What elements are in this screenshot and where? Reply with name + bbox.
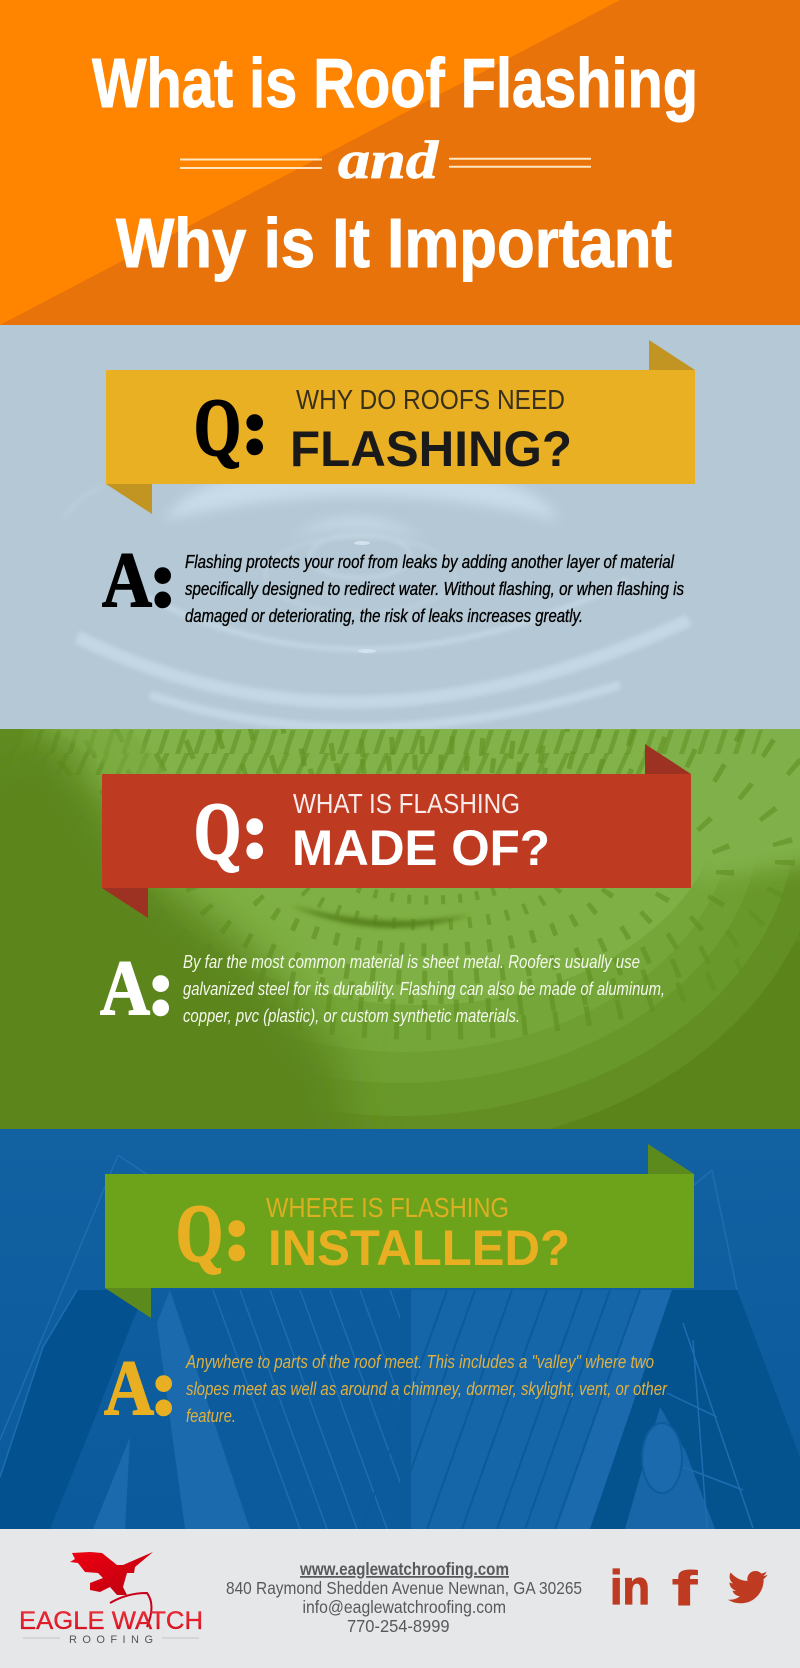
icon: eagle bbox=[70, 1552, 153, 1627]
divider lines left bbox=[180, 160, 322, 168]
ribbon banner bbox=[105, 1144, 694, 1318]
script word: and: and bbox=[338, 130, 439, 190]
question marker: : bbox=[225, 1192, 249, 1275]
question text: WHAT IS FLASHING bbox=[293, 788, 520, 819]
wordmark: EAGLE WATCH bbox=[19, 1607, 203, 1635]
question text bbox=[290, 384, 572, 477]
answer marker: : bbox=[149, 947, 173, 1030]
background: woven swirl facade bbox=[0, 729, 800, 1129]
answer marker: A bbox=[102, 536, 152, 623]
answer text: galvanized steel for its durability. Flashing can also be made of aluminum, bbox=[183, 978, 665, 999]
answer marker: : bbox=[151, 539, 175, 622]
question marker: Q bbox=[194, 786, 241, 877]
answer text bbox=[185, 551, 684, 626]
question marker: : bbox=[243, 790, 267, 873]
icon: twitter bbox=[728, 1571, 768, 1603]
contact details bbox=[226, 1559, 582, 1636]
question text bbox=[292, 788, 550, 876]
answer text: By far the most common material is sheet metal. Roofers usually use bbox=[183, 951, 640, 972]
answer text bbox=[183, 951, 665, 1026]
panel: title header bbox=[0, 0, 800, 325]
answer text: specifically designed to redirect water. Without flashing, or when flashing is bbox=[185, 578, 684, 599]
panel: footer bbox=[0, 1529, 800, 1668]
answer marker: A bbox=[100, 944, 150, 1031]
panel: what is flashing made of bbox=[0, 729, 800, 1129]
question marker: Q bbox=[194, 382, 241, 473]
contact details: 770-254-8999 bbox=[347, 1616, 450, 1636]
background: water ripples bbox=[0, 325, 800, 729]
question marker: Q bbox=[176, 1188, 223, 1279]
icon: facebook: f bbox=[672, 1563, 699, 1616]
tagline: ROOFING bbox=[69, 1634, 153, 1646]
question text bbox=[266, 1192, 570, 1276]
answer text: Flashing protects your roof from leaks by adding another layer of material bbox=[185, 551, 675, 572]
contact details: info@eaglewatchroofing.com bbox=[302, 1597, 506, 1617]
ribbon banner bbox=[106, 340, 695, 514]
answer text: copper, pvc (plastic), or custom synthetic materials. bbox=[183, 1005, 520, 1026]
panel: why do roofs need flashing bbox=[0, 325, 800, 729]
answer marker: A bbox=[104, 1344, 154, 1431]
ribbon banner bbox=[102, 744, 691, 918]
question text: INSTALLED? bbox=[268, 1220, 570, 1276]
answer marker: : bbox=[152, 1347, 176, 1430]
contact details: 840 Raymond Shedden Avenue Newnan, GA 30265 bbox=[226, 1578, 582, 1598]
question text: FLASHING? bbox=[290, 421, 572, 477]
contact details: www.eaglewatchroofing.com bbox=[299, 1559, 509, 1579]
background: steep metal roof building bbox=[0, 1129, 800, 1529]
answer text: slopes meet as well as around a chimney, dormer, skylight, vent, or other bbox=[186, 1378, 668, 1399]
logo: eagle watch roofing bbox=[19, 1552, 203, 1646]
question text: WHY DO ROOFS NEED bbox=[296, 384, 565, 415]
answer text: feature. bbox=[186, 1405, 236, 1426]
question text: WHERE IS FLASHING bbox=[266, 1192, 509, 1223]
question marker: : bbox=[243, 386, 267, 469]
divider lines right bbox=[449, 159, 591, 167]
answer text: damaged or deteriorating, the risk of leaks increases greatly. bbox=[185, 605, 583, 626]
question text: MADE OF? bbox=[292, 820, 550, 876]
heading: why is it important: Why is It Important bbox=[116, 204, 672, 282]
panel: where is flashing installed bbox=[0, 1129, 800, 1529]
icon: linkedin: in bbox=[610, 1562, 650, 1615]
answer text: Anywhere to parts of the roof meet. This includes a "valley" where two bbox=[185, 1351, 654, 1372]
answer text bbox=[185, 1351, 668, 1426]
